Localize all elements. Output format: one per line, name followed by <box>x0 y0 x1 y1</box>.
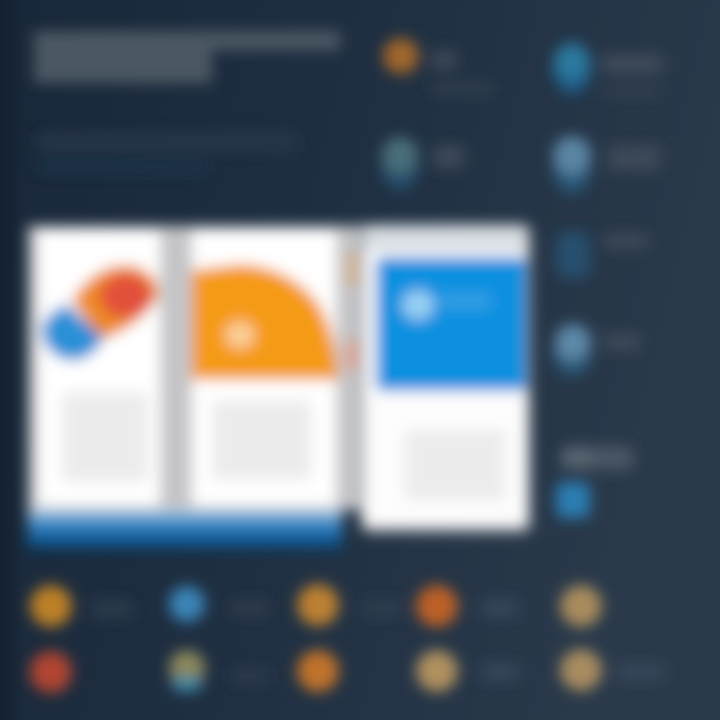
bottom row 2: icon multicolour <box>169 650 205 692</box>
bottom row 2: text <box>618 664 664 680</box>
right column: icon pale blue <box>553 324 591 376</box>
card 3 text lines <box>405 430 505 500</box>
card 1 body <box>38 230 160 506</box>
right column: icon orange <box>383 38 419 74</box>
bottom row 1: text <box>232 600 268 616</box>
card gutter shadow <box>28 226 366 510</box>
card 3 header tint <box>364 226 526 250</box>
right column: icon light blue <box>553 136 591 193</box>
card 2 body <box>192 230 336 506</box>
bottom row 1: icon blue <box>169 586 205 622</box>
panel: right featured card <box>360 224 532 534</box>
bottom row 1: text <box>364 600 400 616</box>
bottom row 1: text <box>482 600 518 616</box>
card 1 footer <box>28 510 342 550</box>
panel: left card <box>28 226 366 550</box>
chart: pie <box>42 265 159 361</box>
right column: text near blue icon <box>602 55 662 96</box>
right column: icon blue <box>553 42 591 94</box>
bottom row 1: icon amber <box>297 584 339 626</box>
bottom row 2: icon orange <box>297 650 339 692</box>
card 3 shadow <box>360 224 532 534</box>
right column: text near dark blue icon <box>604 234 648 248</box>
card 1 text lines <box>62 392 148 482</box>
bottom row 1: icon tan <box>560 585 602 627</box>
right column: text near teal icon <box>434 146 464 168</box>
right column: text near pale blue icon <box>604 334 640 350</box>
bottom row 2: icon red <box>30 651 72 693</box>
title <box>34 31 340 83</box>
bottom row 1: text <box>92 600 132 618</box>
right column: icon dark blue <box>556 232 590 278</box>
card 2 text lines <box>212 400 312 480</box>
right column: icon teal <box>381 137 419 190</box>
card 3 body <box>364 226 526 526</box>
bottom row 1: icon amber <box>30 585 72 627</box>
right column: grey heading <box>560 446 634 470</box>
card 3 blue image <box>376 257 526 391</box>
hidden card edge hints <box>346 252 358 370</box>
card 3 light dot <box>402 290 434 320</box>
right column: text near orange icon <box>432 50 492 94</box>
card 3 heading glow <box>440 294 490 308</box>
panel: middle card <box>192 230 358 506</box>
bottom row 2: icon tan <box>560 649 602 691</box>
right column: icon blue lower <box>556 482 590 518</box>
chart: orange semicircle <box>192 264 338 380</box>
bottom row 1: icon orange <box>416 585 458 627</box>
right column: text near light blue icon <box>608 146 660 170</box>
intro text block <box>38 132 296 174</box>
bottom row 2: text <box>482 664 518 680</box>
bottom row 2: icon tan <box>416 650 458 692</box>
bottom row 2: text <box>232 668 268 684</box>
